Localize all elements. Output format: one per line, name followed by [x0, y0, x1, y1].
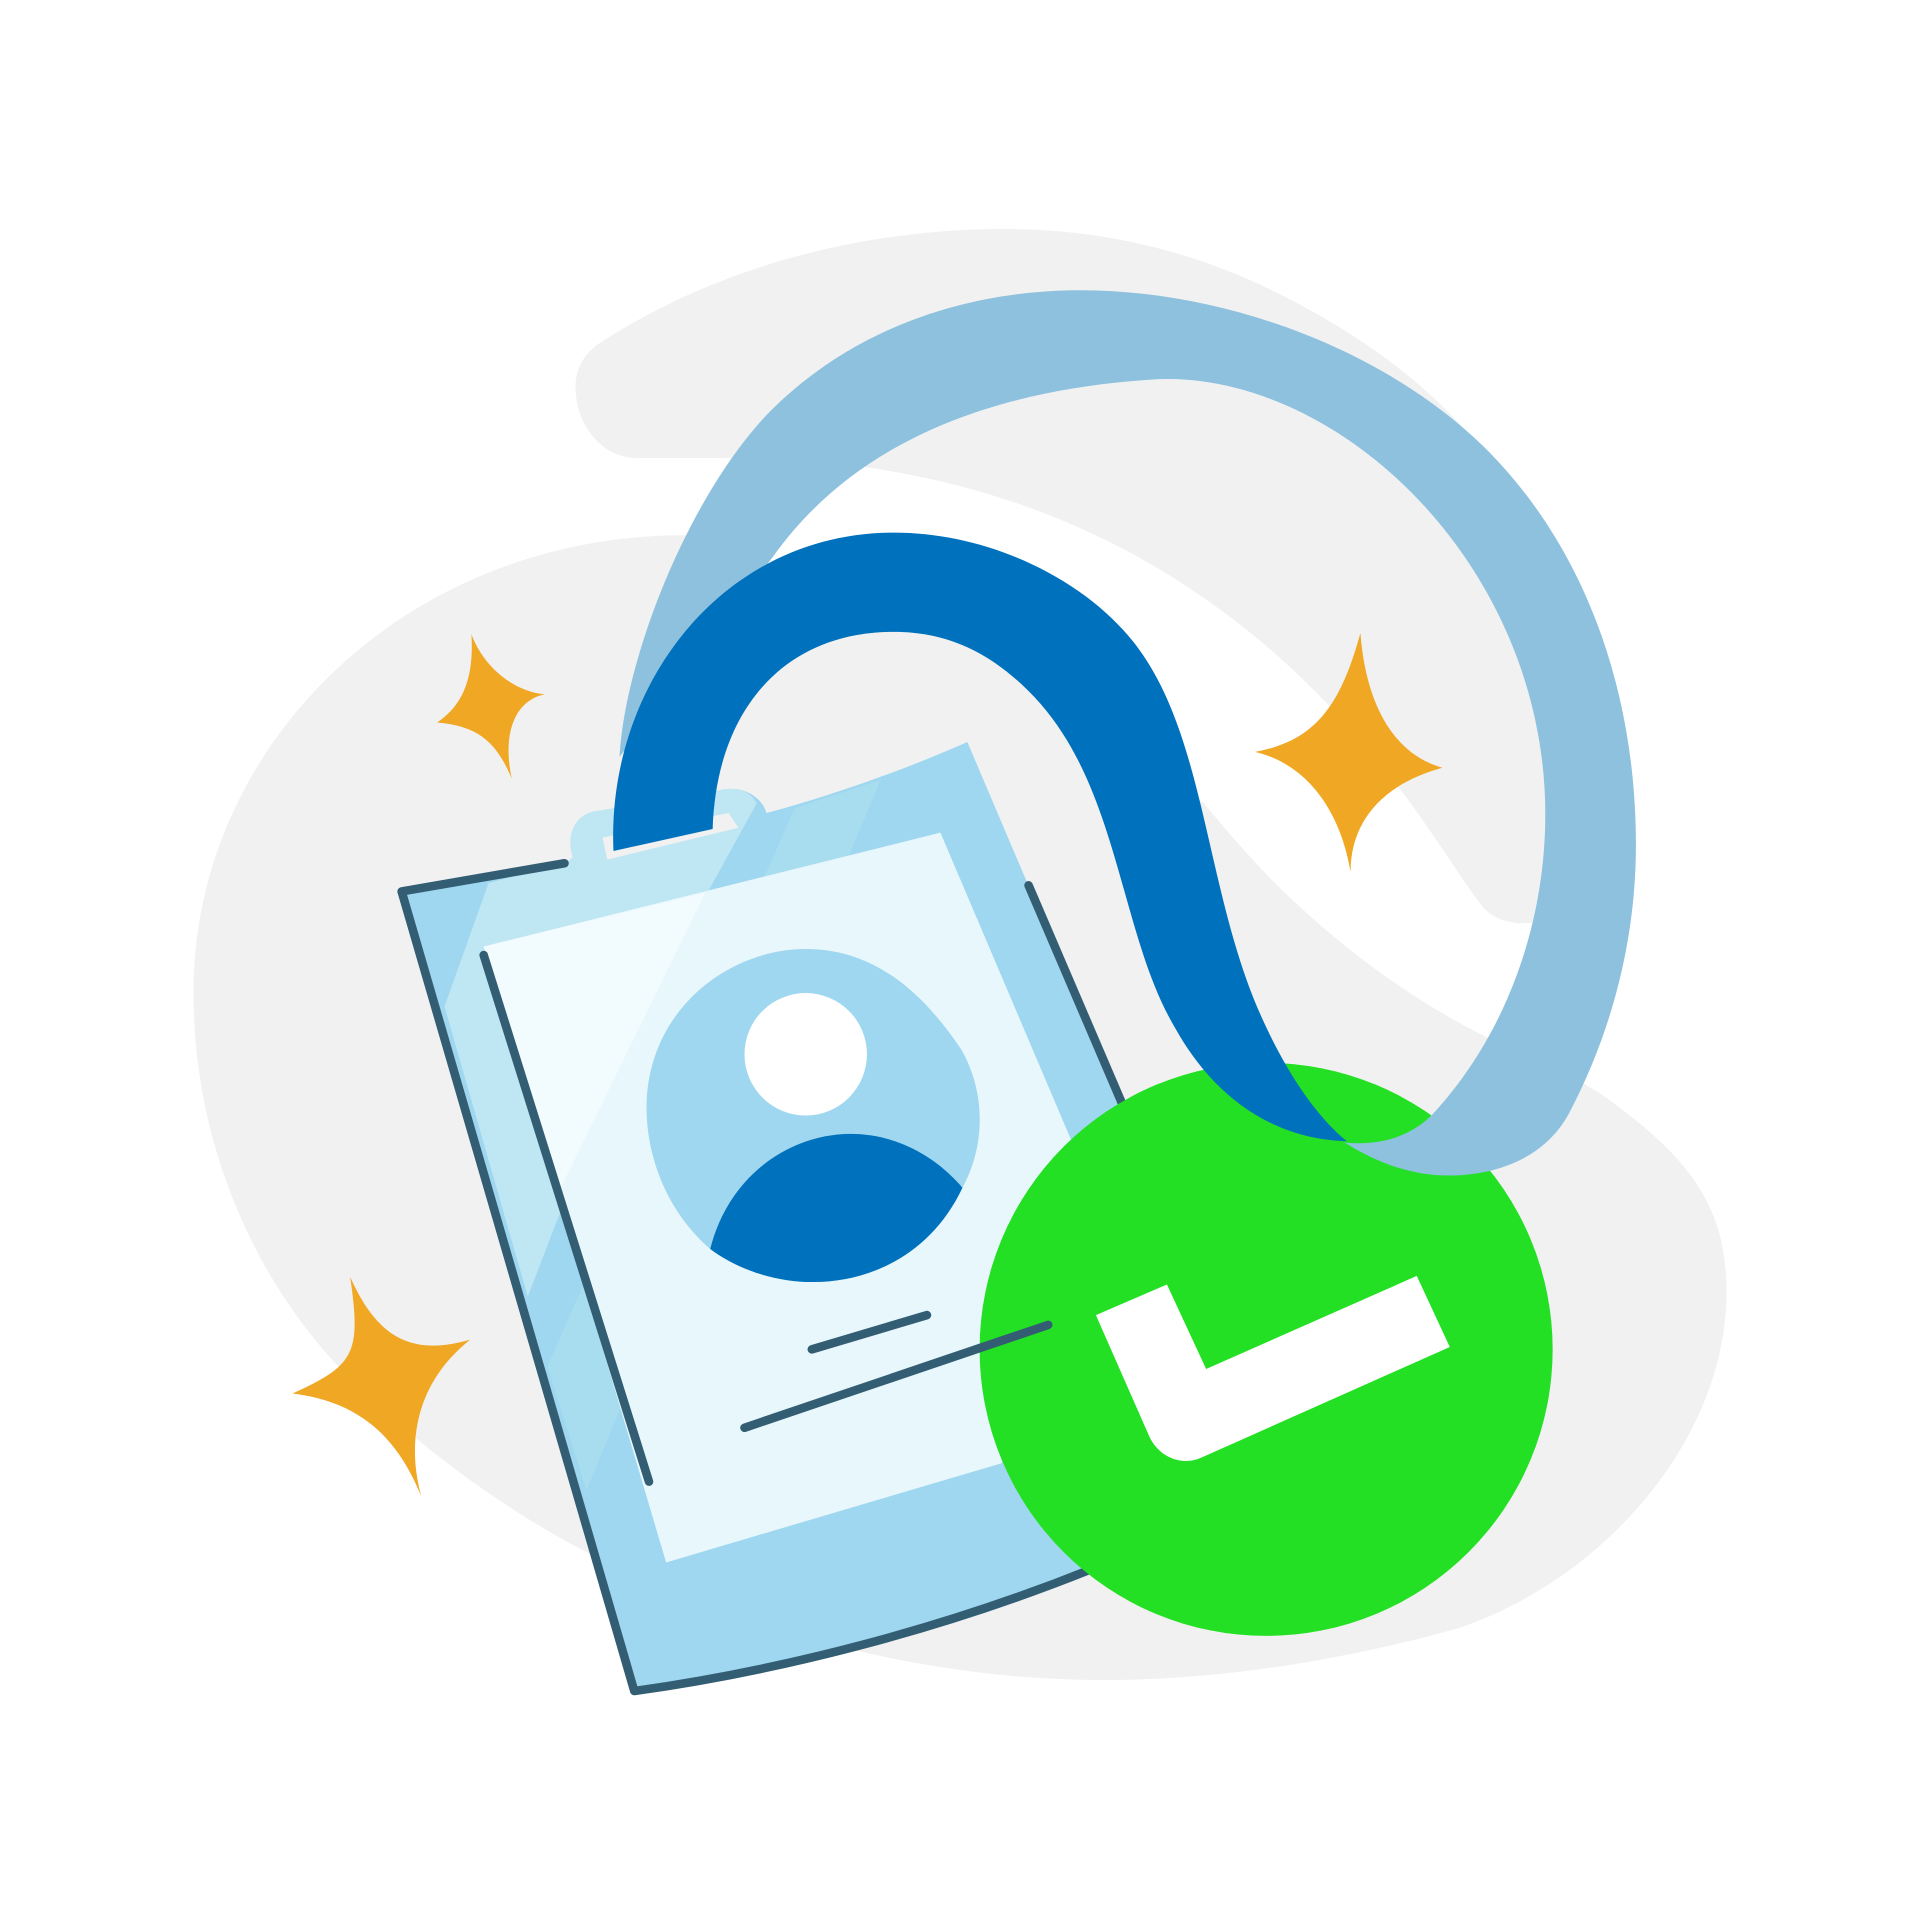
background blobs: [193, 229, 1727, 1680]
light ribbon strap: [620, 290, 1636, 1176]
text line stroke over circle: [744, 1325, 1048, 1428]
sparkle: top left: [437, 634, 545, 779]
green verification circle: [980, 1063, 1553, 1636]
badge glass highlight: [444, 789, 757, 1297]
ID badge: [402, 742, 1139, 1691]
photo card highlight: [484, 893, 705, 1190]
badge body: [402, 742, 1139, 1691]
avatar circle: [647, 949, 980, 1282]
dark blue lanyard: [613, 533, 1347, 1141]
sparkle: bottom left: [293, 1277, 470, 1496]
lanyard slot: [602, 813, 738, 860]
sparkle: right: [1255, 633, 1442, 872]
avatar head: [744, 993, 867, 1116]
badge glass band: [547, 780, 880, 1490]
badge outline strokes: [402, 863, 1124, 1691]
photo card: [484, 833, 1084, 1562]
icon: white check mark: [1096, 1276, 1450, 1461]
avatar shoulders: [710, 1134, 962, 1282]
